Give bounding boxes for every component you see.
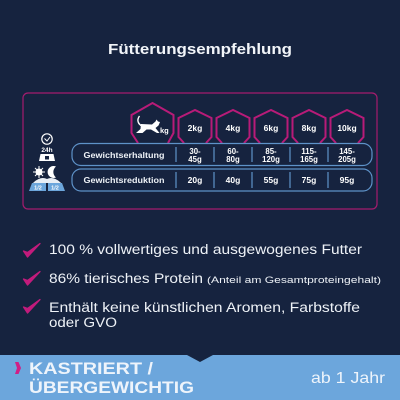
weight hexagons <box>178 110 364 143</box>
title: Fütterungsempfehlung <box>108 41 292 58</box>
bottom band <box>0 355 400 400</box>
row: Gewichtserhaltung: 205g <box>338 155 356 164</box>
row: Gewichtserhaltung: 45g <box>188 155 202 164</box>
icon: cat weight hexagon <box>132 103 174 143</box>
icon: check 2 <box>24 272 40 285</box>
icon: check 3 <box>24 300 40 313</box>
row: Gewichtsreduktion: 55g <box>264 175 278 185</box>
label: target group <box>29 359 194 397</box>
row: Gewichtsreduktion: 40g <box>226 175 240 185</box>
weight labels: 10kg <box>337 123 357 133</box>
row: Gewichtsreduktion: 75g <box>302 175 316 185</box>
label: target group: ÜBERGEWICHTIG <box>29 378 194 397</box>
benefit: complete food: 100 % vollwertiges und ausgewogenes Futter <box>49 242 363 257</box>
icon: sun, moon and half portions <box>29 166 65 192</box>
row: Gewichtsreduktion: 95g <box>340 175 354 185</box>
weight labels: 6kg <box>264 123 278 133</box>
row: Gewichtserhaltung: 120g <box>262 155 280 164</box>
row: Gewichtserhaltung: 80g <box>226 155 240 164</box>
icon: cat <box>136 116 160 133</box>
unit label: kg: kg <box>160 126 169 135</box>
row: Gewichtserhaltung: 145- <box>339 147 355 156</box>
benefit: no additives <box>49 300 360 330</box>
benefit note: protein share: (Anteil am Gesamtproteingehalt) <box>207 275 381 286</box>
label: age: ab 1 Jahr <box>311 370 386 387</box>
benefit: no additives: Enthält keine künstlichen Aromen, Farbstoffe <box>49 300 360 315</box>
panel: feeding table <box>23 93 377 209</box>
row: Gewichtserhaltung <box>72 144 372 166</box>
row: Gewichtserhaltung: 30- <box>189 147 201 156</box>
row: Gewichtsreduktion: 20g <box>188 175 202 185</box>
icon: chevron <box>15 362 21 374</box>
icon: sun, moon and half portions: 1/2 <box>51 186 59 192</box>
benefit: no additives: oder GVO <box>49 315 117 330</box>
row: Gewichtsreduktion <box>72 169 372 191</box>
benefit list <box>24 242 381 330</box>
weight labels: 2kg <box>188 123 202 133</box>
weight labels: 8kg <box>302 123 316 133</box>
weight labels <box>188 123 357 133</box>
benefit: animal protein: 86% tierisches Protein <box>49 271 203 286</box>
icon: clock, 24h and bowl <box>39 134 55 161</box>
row: Gewichtserhaltung: 115- <box>301 147 317 156</box>
icon: check 1 <box>24 244 40 257</box>
row: Gewichtserhaltung: Gewichtserhaltung <box>84 150 164 160</box>
row: Gewichtserhaltung: 60- <box>227 147 239 156</box>
row: Gewichtsreduktion: Gewichtsreduktion <box>84 175 164 185</box>
icon: sun, moon and half portions: 1/2 <box>34 186 42 192</box>
row: Gewichtserhaltung: 165g <box>300 155 318 164</box>
row: Gewichtserhaltung: 85- <box>265 147 277 156</box>
icon: clock, 24h and bowl: 24h <box>41 147 53 154</box>
label: target group: KASTRIERT / <box>29 359 153 378</box>
weight labels: 4kg <box>226 123 240 133</box>
